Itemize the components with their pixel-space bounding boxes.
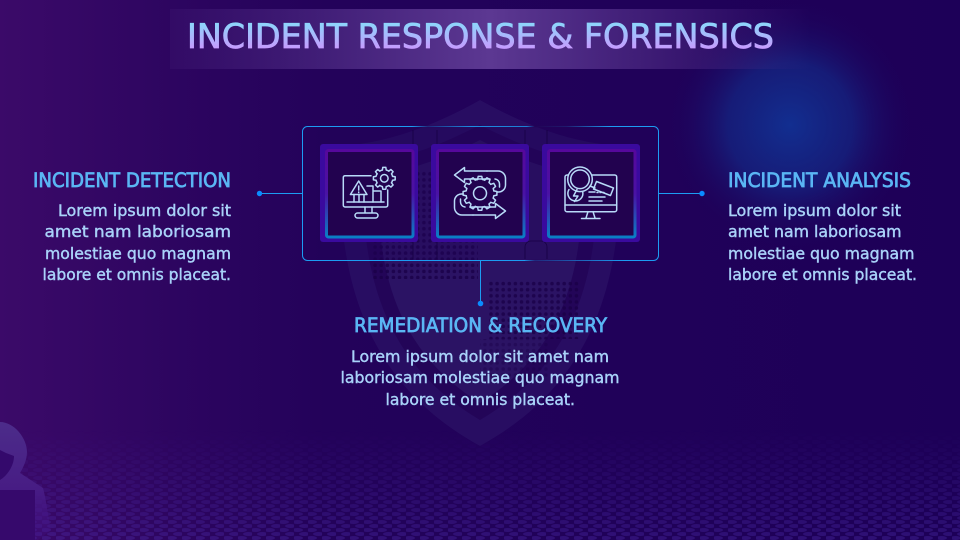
text block: remediation and recovery: REMEDIATION & RECOVERY	[354, 314, 607, 337]
connector: detection	[257, 191, 302, 196]
text block: incident detection	[33, 169, 231, 284]
icon: monitor with magnifier	[565, 167, 617, 218]
text block: incident detection: Lorem ipsum dolor sit	[58, 201, 231, 220]
connector: analysis	[659, 191, 705, 196]
icon: monitor alert with gear	[343, 167, 395, 218]
hooded hacker silhouette	[0, 422, 51, 540]
title	[170, 9, 810, 69]
text block: remediation and recovery: laboriosam molestiae quo magnam	[340, 368, 620, 387]
text block: incident detection: molestiae quo magnam	[45, 244, 231, 263]
icon: cycle arrows around gear	[454, 168, 506, 218]
shield watermark	[340, 100, 620, 446]
text block: incident analysis: amet nam laboriosam	[728, 222, 902, 241]
text block: remediation and recovery: Lorem ipsum dolor sit amet nam	[351, 347, 609, 366]
frame: icon row	[302, 126, 658, 260]
text block: incident analysis	[728, 169, 917, 284]
text block: remediation and recovery	[340, 314, 620, 409]
text block: incident analysis: INCIDENT ANALYSIS	[728, 169, 911, 192]
background mesh floor	[20, 462, 960, 540]
card: remediation icon	[431, 144, 529, 242]
card: detection icon	[320, 144, 418, 242]
text block: incident analysis: molestiae quo magnam	[728, 244, 914, 263]
halftone dots	[372, 170, 579, 379]
connector: remediation	[478, 261, 483, 306]
text block: incident analysis: labore et omnis placeat.	[728, 265, 917, 284]
card: analysis icon	[542, 144, 640, 242]
text block: incident detection: INCIDENT DETECTION	[33, 169, 231, 192]
text block: incident analysis: Lorem ipsum dolor sit	[728, 201, 901, 220]
text block: remediation and recovery: labore et omnis placeat.	[386, 390, 575, 409]
text block: incident detection: labore et omnis placeat.	[42, 265, 231, 284]
title: INCIDENT RESPONSE & FORENSICS	[187, 17, 774, 56]
text block: incident detection: amet nam laboriosam	[44, 222, 231, 241]
